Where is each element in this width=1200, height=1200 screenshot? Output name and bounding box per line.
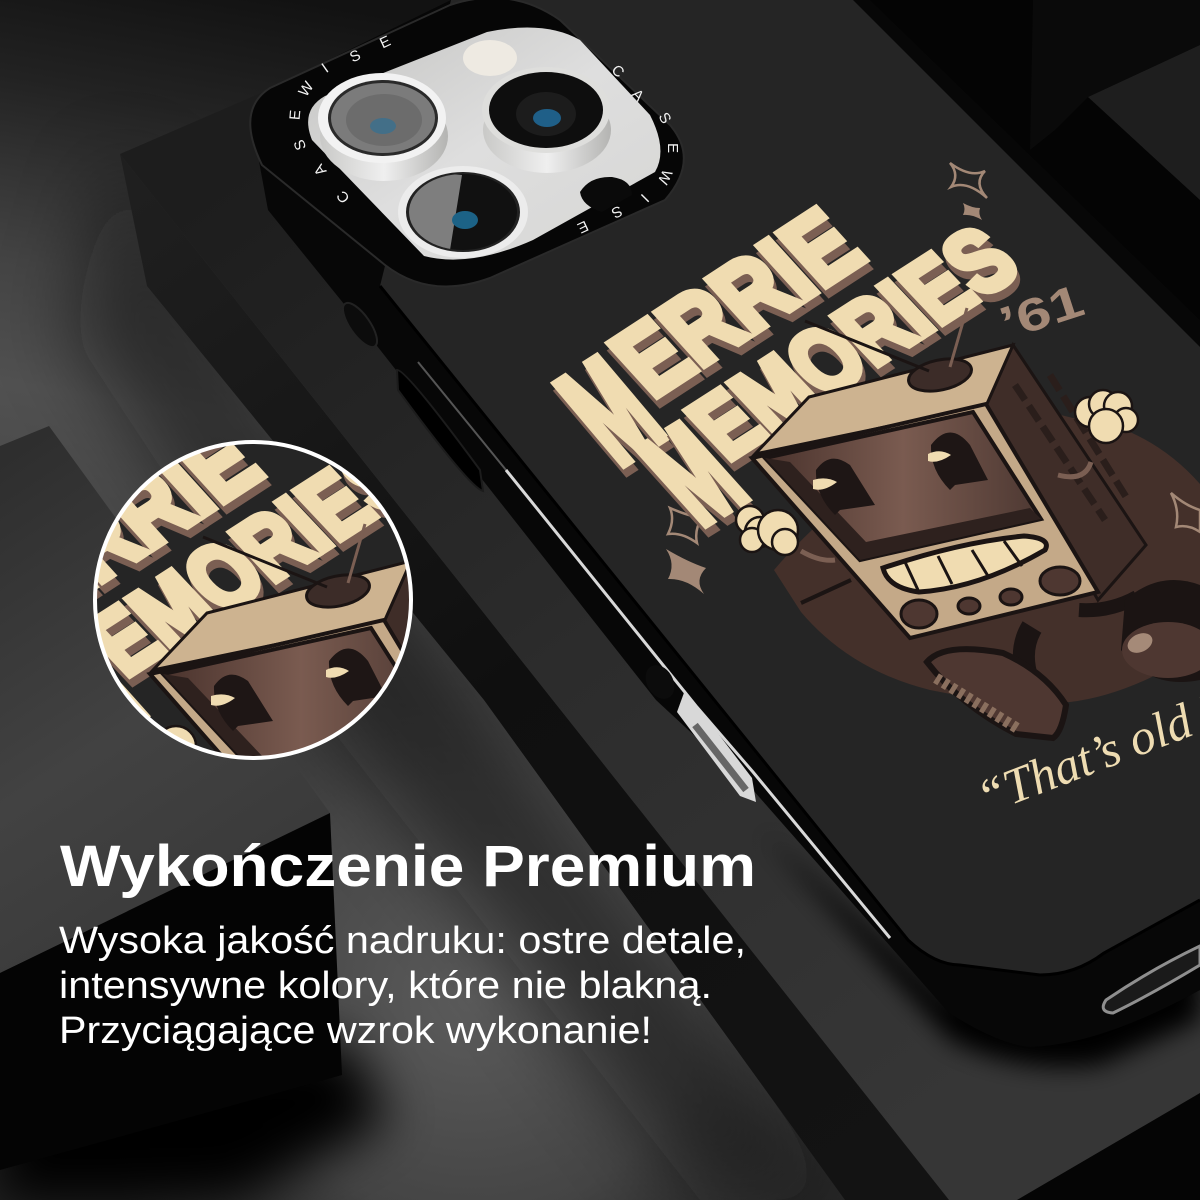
inset border (95, 442, 411, 758)
body text: intensywne kolory, które nie blakną. (59, 965, 712, 1007)
inset disc (95, 442, 411, 758)
back panel (380, 0, 1200, 975)
inset title MEMORIES (98, 464, 386, 717)
tv screen (765, 412, 1041, 560)
inset tv screen (160, 626, 396, 756)
camera ring text: A (311, 161, 330, 179)
inset title MEMORIES: M (11, 614, 171, 767)
button shadow detail (695, 725, 746, 790)
inset eye glints (211, 667, 349, 706)
tv right side (986, 345, 1146, 600)
right fist (1058, 390, 1138, 477)
antenna two (950, 308, 967, 367)
antennas (805, 321, 929, 371)
title MERRIE (531, 189, 886, 500)
body text (59, 920, 746, 1052)
title MEMORIES: M (616, 406, 776, 559)
title MEMORIES: EMORIES (668, 208, 1038, 477)
panel edge line (380, 286, 1200, 975)
inset tv side (386, 574, 409, 646)
eye left (816, 459, 875, 515)
phone (250, 0, 1200, 1067)
phone body (254, 0, 1200, 1047)
usb port (1103, 946, 1200, 1013)
mic hole (580, 177, 632, 212)
side button upper (397, 370, 483, 491)
title MERRIE: M (534, 339, 694, 500)
circle divider (801, 580, 851, 603)
heading: Wykończenie Premium (60, 834, 756, 899)
eye right (931, 432, 988, 490)
title MERRIE: ERRIE (590, 189, 883, 415)
camera ring text: W (653, 167, 675, 188)
stars (666, 163, 1200, 594)
camera ring text: E (377, 33, 393, 52)
print artwork (531, 163, 1200, 825)
inset title MEMORIES: EMORIES (69, 432, 439, 701)
glass plate (308, 28, 660, 260)
title MEMORIES: M (613, 398, 773, 551)
inset magnifier (93, 440, 413, 760)
camera ring text: C (333, 187, 353, 206)
camera ring text: W (295, 78, 318, 100)
inset title MEMORIES: M (14, 622, 174, 775)
antenna knob (906, 354, 974, 396)
camera ring text (287, 33, 681, 236)
inset tv top (153, 561, 411, 670)
camera ring text: S (655, 110, 674, 127)
inset artwork (97, 445, 409, 756)
title MERRIE: M (531, 331, 691, 492)
tv knobs (901, 567, 1080, 628)
camera ring text: C (608, 62, 628, 81)
lens top right (482, 67, 611, 173)
title MERRIE: ERRIE (593, 197, 886, 423)
background block right (850, 0, 1200, 340)
left leg and shoe (927, 627, 1066, 738)
camera ring text: A (628, 86, 647, 105)
camera ring text: S (347, 47, 363, 66)
body text: Wysoka jakość nadruku: ostre detale, (59, 920, 746, 962)
year: ’61 (993, 274, 1090, 350)
inset antenna one (203, 537, 327, 587)
screen bevel (765, 458, 1041, 560)
lower left block (0, 426, 390, 1200)
inset eye left (214, 675, 273, 731)
eye glints (813, 451, 951, 490)
lens bottom (398, 166, 528, 258)
lens top left (318, 73, 448, 181)
camera ring text: I (637, 190, 652, 205)
inset antenna knob (305, 574, 371, 609)
tv front (752, 404, 1098, 638)
inset screen bevel (164, 674, 262, 756)
left fist (736, 506, 835, 560)
camera ring text: E (664, 143, 681, 153)
title MEMORIES (613, 208, 1041, 559)
inset fist (164, 724, 197, 746)
side switch (337, 298, 383, 352)
phone shadow (760, 830, 1200, 1067)
inset title MERRIE (97, 445, 272, 599)
tv top (755, 345, 1013, 454)
hole (640, 660, 680, 704)
title MEMORIES: EMORIES (671, 216, 1041, 485)
body text: Przyciągające wzrok wykonanie! (59, 1010, 652, 1052)
edge highlight bright (506, 470, 890, 938)
inset eye right (329, 648, 386, 706)
inset tv front (146, 618, 402, 755)
mouth (883, 536, 1046, 592)
inset antenna two (348, 524, 365, 583)
camera module (250, 0, 684, 286)
flash (463, 40, 517, 76)
camera ring (250, 0, 684, 286)
camera ring text: S (609, 202, 625, 221)
inset title MEMORIES: EMORIES (66, 424, 436, 693)
camera ring text: E (287, 109, 304, 121)
right leg and shoe (1079, 580, 1200, 682)
edge highlight (418, 362, 506, 470)
dark brown circle (774, 400, 1200, 702)
camera ring text: I (319, 60, 332, 77)
camera ring text: E (575, 217, 591, 236)
silver button (677, 690, 756, 802)
camera ring text: S (291, 137, 310, 152)
